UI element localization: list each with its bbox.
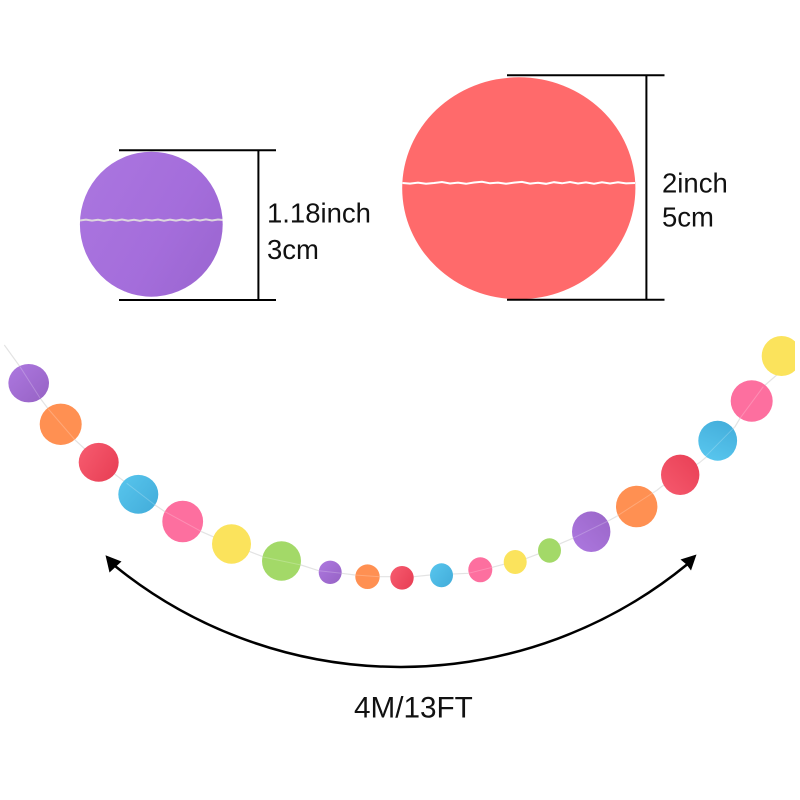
- purple circle stitching: [80, 219, 222, 221]
- red circle size label: 2inch: [662, 168, 728, 198]
- red circle metric label: 5cm: [662, 202, 714, 232]
- garland string: [4, 345, 777, 577]
- small beads, centre: [319, 538, 561, 590]
- string showing over beads: [20, 367, 763, 577]
- red paper circle: [402, 77, 635, 299]
- infographic canvas: [4, 74, 795, 718]
- double-headed curved arrow: [106, 554, 696, 667]
- large beads, left: [8, 364, 301, 581]
- small purple circle with dimensions: [80, 150, 371, 300]
- large red circle with dimensions: [402, 75, 728, 300]
- purple circle size label: 1.18inch: [267, 197, 371, 228]
- purple paper circle: [80, 152, 223, 297]
- purple circle size bracket: [119, 150, 276, 300]
- length label: 4M/13FT: [354, 692, 473, 725]
- red circle stitching: [402, 182, 635, 184]
- red circle size bracket: [507, 75, 664, 300]
- garland of coloured circles: [8, 336, 800, 590]
- large beads, right: [572, 336, 800, 552]
- purple circle metric label: 3cm: [267, 234, 319, 265]
